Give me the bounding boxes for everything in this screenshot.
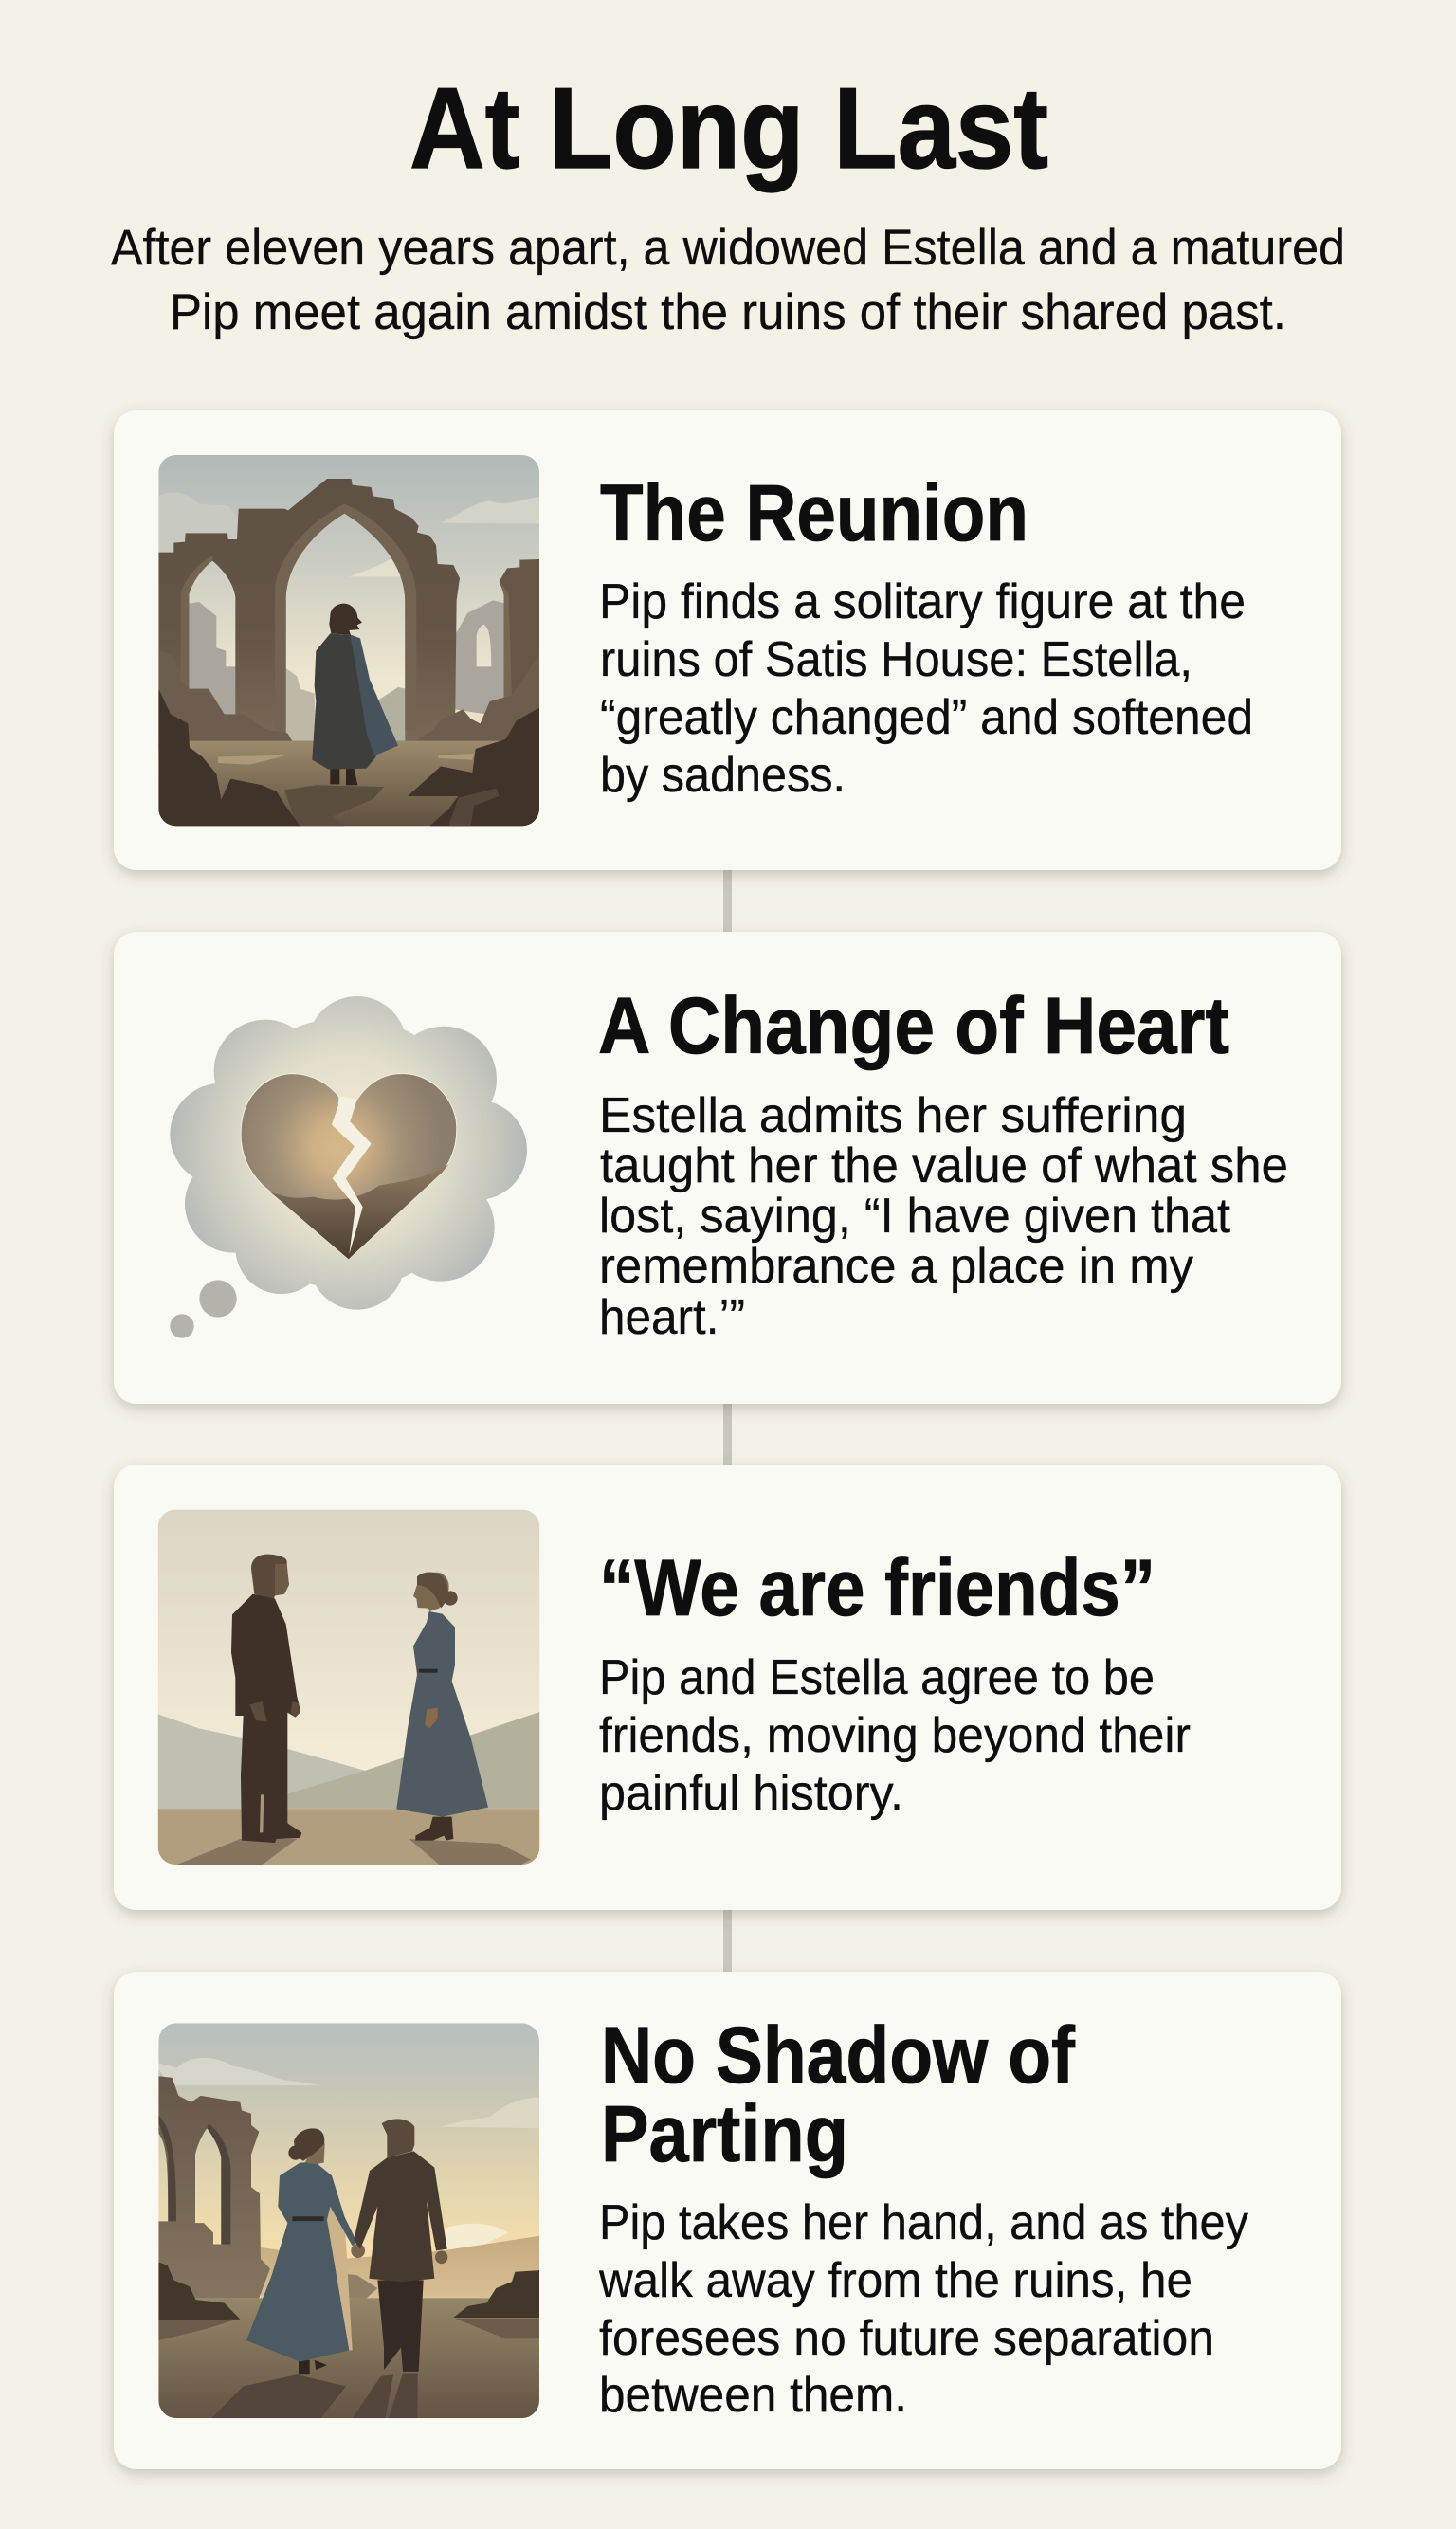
title: At Long Last	[410, 64, 1048, 192]
heading	[601, 2010, 1076, 2178]
panel: no shadow of parting	[114, 1972, 1341, 2469]
subtitle: After eleven years apart, a widowed Estella and a matured	[111, 220, 1345, 276]
body text: painful history.	[599, 1766, 903, 1821]
heading: Parting	[601, 2089, 848, 2178]
body text	[598, 2195, 1248, 2423]
card background	[114, 410, 1341, 870]
heading: “We are friends”	[599, 1543, 1156, 1632]
body text: “greatly changed” and softened	[600, 690, 1253, 745]
illustration: figure in ruins	[158, 455, 539, 826]
body text: remembrance a place in my	[599, 1239, 1193, 1294]
illustration: two figures facing	[158, 1510, 539, 1865]
illustration: couple walking away from ruins	[158, 2023, 539, 2418]
body text: Pip finds a solitary figure at the	[599, 574, 1246, 629]
body text: heart.’”	[599, 1290, 745, 1345]
card background	[114, 1972, 1341, 2469]
heading: No Shadow of	[601, 2010, 1076, 2100]
card background	[114, 1465, 1341, 1910]
body text: between them.	[599, 2368, 907, 2423]
subtitle	[111, 220, 1345, 340]
body text: Pip and Estella agree to be	[599, 1650, 1155, 1705]
card background	[114, 932, 1341, 1404]
icon: thought cloud with broken heart	[170, 996, 527, 1338]
panel: the reunion	[114, 410, 1341, 870]
panel: a change of heart	[114, 932, 1341, 1404]
body text: taught her the value of what she	[600, 1138, 1288, 1193]
connector: timeline segments	[723, 867, 732, 1975]
body text: Pip takes her hand, and as they	[599, 2195, 1248, 2250]
body text	[599, 1650, 1191, 1821]
body text: walk away from the ruins, he	[598, 2253, 1192, 2308]
panel: we are friends	[114, 1465, 1341, 1910]
body text: lost, saying, “I have given that	[599, 1189, 1231, 1244]
body text: by sadness.	[600, 748, 846, 803]
body text: foresees no future separation	[599, 2311, 1214, 2366]
body text: Estella admits her suffering	[599, 1088, 1187, 1143]
body text	[599, 1088, 1288, 1345]
body text	[599, 574, 1253, 803]
body text: friends, moving beyond their	[599, 1708, 1191, 1763]
heading: The Reunion	[600, 468, 1028, 557]
subtitle: Pip meet again amidst the ruins of their shared past.	[170, 284, 1286, 340]
heading: A Change of Heart	[598, 981, 1229, 1070]
body text: ruins of Satis House: Estella,	[600, 632, 1192, 687]
